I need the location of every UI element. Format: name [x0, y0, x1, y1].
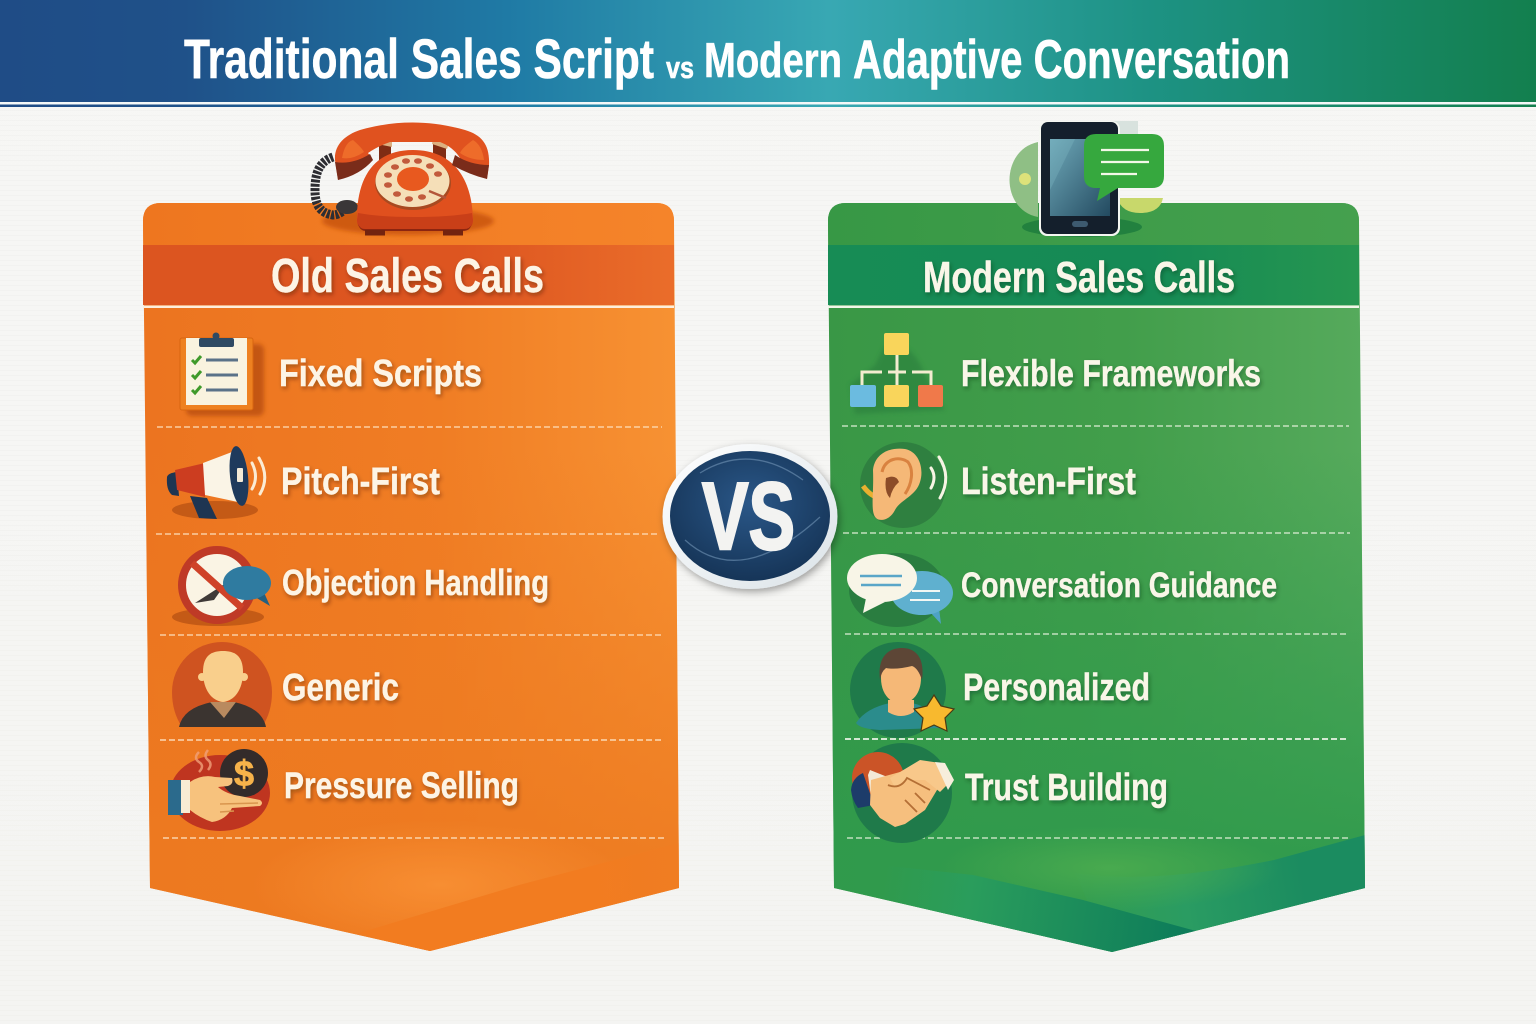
- VS badge: [662, 444, 838, 589]
- item label: pressure selling: Pressure Selling: [284, 765, 519, 806]
- item label: trust building: Trust Building: [965, 767, 1168, 809]
- icon: megaphone: [167, 445, 265, 519]
- header banner: [0, 0, 1536, 107]
- title: Adaptive Conversation: [853, 28, 1290, 90]
- icon: ear with sound waves: [860, 442, 946, 528]
- VS badge: VS: [702, 463, 795, 570]
- icon: generic person: [172, 642, 272, 727]
- icon: no talking sign: [172, 550, 271, 626]
- icon: rotary telephone: [315, 122, 494, 236]
- title: Traditional Sales Script: [184, 27, 654, 90]
- title: [184, 27, 1290, 90]
- title: Modern: [704, 34, 842, 88]
- panel heading: modern sales calls: Modern Sales Calls: [923, 253, 1235, 302]
- item label: flexible frameworks: Flexible Frameworks: [961, 353, 1261, 394]
- icon: pressure selling hand and coin: $: [234, 753, 254, 794]
- item label: listen-first: Listen-First: [961, 461, 1136, 503]
- icon: personalized customer with star: [850, 642, 954, 738]
- title: vs: [666, 50, 694, 85]
- icon: conversation bubbles: [847, 553, 953, 627]
- item label: personalized: Personalized: [963, 667, 1150, 709]
- panel: modern sales calls: [825, 203, 1370, 960]
- icon: clipboard checklist: [180, 332, 264, 416]
- icon: pressure selling hand and coin: [168, 749, 270, 831]
- panel: old sales calls: [140, 203, 685, 960]
- item label: fixed scripts: Fixed Scripts: [279, 353, 482, 395]
- item label: objection handling: Objection Handling: [282, 562, 549, 603]
- icon: handshake: [851, 743, 954, 843]
- panel heading: old sales calls: Old Sales Calls: [271, 250, 544, 303]
- icon: flexible framework diagram: [850, 333, 945, 414]
- item label: conversation guidance: Conversation Guidance: [961, 566, 1277, 605]
- item label: pitch-first: Pitch-First: [281, 461, 440, 503]
- icon: smartphone with chat bubble: [1010, 121, 1164, 237]
- item label: generic: Generic: [282, 667, 399, 709]
